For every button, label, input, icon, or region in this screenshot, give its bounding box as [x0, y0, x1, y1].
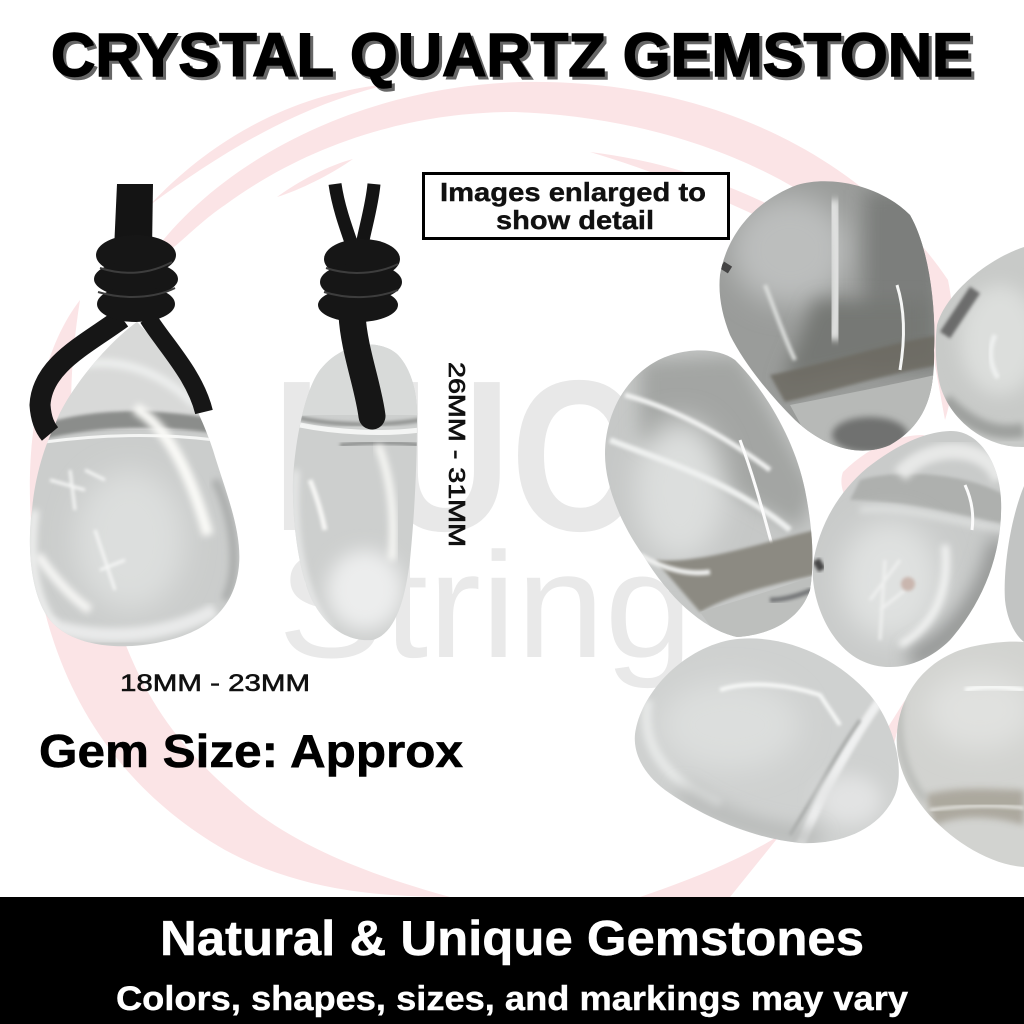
- watermark logo text: [272, 335, 693, 689]
- stone: dark top: [719, 181, 940, 460]
- stone: right edge: [1005, 486, 1024, 642]
- bottom banner: [0, 897, 1024, 1024]
- watermark logo text: LUC: [272, 335, 640, 576]
- upper cord: [335, 184, 374, 245]
- stone: left big: [605, 350, 815, 640]
- pink swirl logo: [30, 82, 985, 897]
- stone: top right edge: [936, 247, 1024, 447]
- title: CRYSTAL QUARTZ GEMSTONE: [51, 21, 973, 89]
- callout: images enlarged: show detail: [496, 205, 654, 235]
- gemstone pile photo: [605, 181, 1024, 867]
- callout: images enlarged: [424, 174, 728, 238]
- stone: bottom center: [635, 638, 899, 845]
- knot: [318, 239, 402, 322]
- pendant front view: [20, 184, 250, 646]
- banner subheading: Colors, shapes, sizes, and markings may vary: [116, 980, 908, 1018]
- stone: [293, 345, 417, 640]
- callout: images enlarged: Images enlarged to: [440, 177, 706, 207]
- pendant side view: [290, 184, 420, 640]
- knot: [94, 235, 178, 322]
- height dimension label: 26MM - 31MM: [444, 362, 470, 547]
- stone: [30, 322, 239, 646]
- cord through stone: [352, 315, 372, 416]
- upper cord: [114, 184, 153, 250]
- title: CRYSTAL QUARTZ GEMSTONE: [54, 24, 976, 92]
- gem size heading: Gem Size: Approx: [39, 725, 463, 777]
- banner heading: Natural & Unique Gemstones: [160, 912, 864, 966]
- width dimension label: 18MM - 23MM: [120, 670, 310, 697]
- stone: center: [813, 431, 1005, 667]
- stone: bottom right: [897, 642, 1024, 867]
- cord loop: [40, 318, 122, 434]
- watermark logo text: String: [278, 521, 693, 689]
